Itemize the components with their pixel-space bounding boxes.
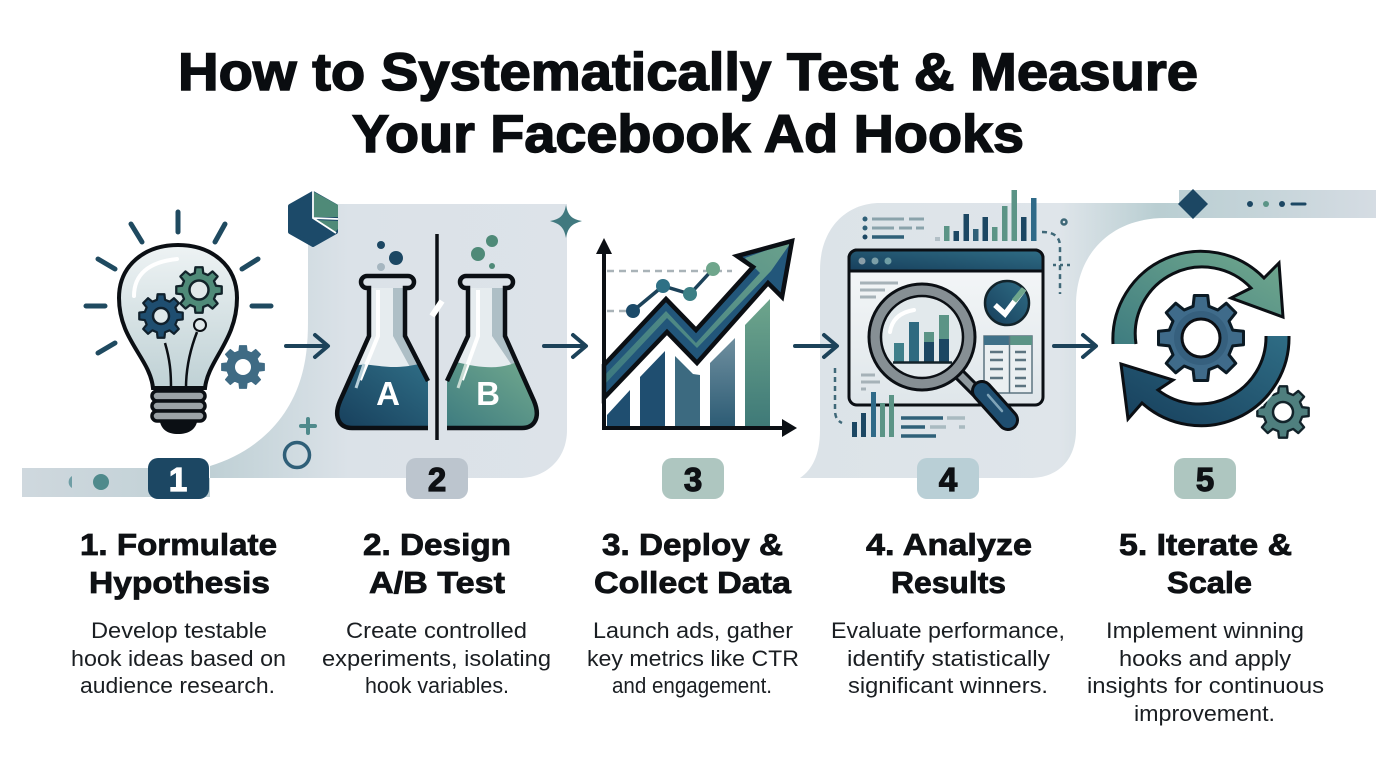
background ribbon: left band and panel 2 <box>22 204 567 497</box>
description: and engagement. <box>612 673 772 698</box>
decoration: plus sign <box>301 419 315 433</box>
filament loop <box>194 319 206 331</box>
window text lines <box>860 283 898 297</box>
step 5 text <box>1087 527 1324 726</box>
data line <box>626 262 720 318</box>
step 2 A/B flasks icon <box>337 234 537 440</box>
heading: Results <box>891 565 1006 600</box>
step badge 5 <box>1174 458 1236 499</box>
green gear <box>176 267 222 313</box>
central gear <box>1159 296 1243 380</box>
divider break <box>432 301 442 316</box>
step 1 lightbulb icon <box>86 212 271 434</box>
flask A <box>337 276 428 428</box>
title <box>178 43 1198 164</box>
heading: Scale <box>1167 565 1252 600</box>
heading: 5. Iterate & <box>1119 527 1292 562</box>
small side gear <box>222 346 264 388</box>
flask A: A <box>376 375 400 412</box>
step 5 iterate cycle icon <box>1113 251 1309 438</box>
data table <box>984 336 1032 393</box>
heading: Collect Data <box>594 565 792 600</box>
flask B <box>447 276 537 428</box>
description: identify statistically <box>847 646 1051 671</box>
dashed connector bottom left <box>835 368 842 423</box>
step badge 1: 1 <box>169 461 187 498</box>
heading <box>363 527 511 600</box>
bottom text list <box>901 418 965 436</box>
step badge 2: 2 <box>428 461 446 498</box>
top text list <box>862 216 924 240</box>
green arrow outline <box>1113 251 1283 344</box>
decoration: four-point star <box>550 205 582 238</box>
decoration: band dots and dash <box>1247 201 1305 207</box>
decoration: band half dot <box>69 476 72 488</box>
divider <box>435 234 439 440</box>
arrow 3 to 4 <box>795 335 837 357</box>
bottom bar chart <box>852 392 894 437</box>
rising bars <box>607 299 770 426</box>
light rays <box>86 212 271 353</box>
heading: 3. Deploy & <box>602 527 783 562</box>
decoration: diamond <box>1178 189 1208 219</box>
step 4 dashboard analysis icon <box>835 190 1070 437</box>
description: Evaluate performance, <box>831 618 1065 643</box>
step badge 4: 4 <box>939 461 958 498</box>
description <box>71 618 286 698</box>
description: Create controlled <box>346 618 527 643</box>
description: Implement winning <box>1106 618 1304 643</box>
decoration: band dot <box>93 474 109 490</box>
decoration: hexagon pie icon <box>290 191 338 245</box>
description <box>1087 618 1324 726</box>
magnifying glass <box>869 284 1008 420</box>
lower window text lines <box>861 375 880 389</box>
description <box>587 618 799 698</box>
heading <box>1119 527 1292 600</box>
heading: Hypothesis <box>89 565 270 600</box>
dashed connector top right <box>1042 220 1070 294</box>
step 3 text <box>587 527 799 698</box>
decoration: ring <box>284 442 310 468</box>
description: Develop testable <box>91 618 267 643</box>
description: insights for continuous <box>1087 673 1324 698</box>
description: hook ideas based on <box>71 646 286 671</box>
glass bulb <box>119 245 237 388</box>
trend arrow <box>604 241 792 398</box>
description: key metrics like CTR <box>587 646 799 671</box>
step badge 3 <box>662 458 724 499</box>
browser window <box>849 250 1043 405</box>
step badge 4 <box>917 458 979 499</box>
description: hook variables. <box>365 673 509 698</box>
step badge 3: 3 <box>684 461 702 498</box>
blue arrow outline <box>1121 336 1289 426</box>
blue gear <box>139 294 183 338</box>
heading: A/B Test <box>369 565 505 600</box>
small gear <box>1257 386 1309 438</box>
bulb highlight <box>134 259 177 296</box>
arrow 4 to 5 <box>1054 335 1096 357</box>
heading: 4. Analyze <box>866 527 1032 562</box>
heading <box>866 527 1032 600</box>
green upper cycle arrow <box>1113 251 1283 344</box>
heading: 2. Design <box>363 527 511 562</box>
description <box>322 618 551 698</box>
description: experiments, isolating <box>322 646 551 671</box>
filament wires <box>165 332 197 388</box>
arrow 1 to 2 <box>286 335 328 357</box>
axes <box>596 238 797 437</box>
bulb screw base <box>152 391 205 421</box>
description: improvement. <box>1134 701 1275 726</box>
description: Launch ads, gather <box>593 618 794 643</box>
heading <box>80 527 277 600</box>
background ribbon: panel 4 and right band <box>800 190 1376 478</box>
title: Your Facebook Ad Hooks <box>352 105 1024 164</box>
blue lower cycle arrow <box>1121 336 1289 426</box>
step 2 text <box>322 527 551 698</box>
bulb tip <box>160 422 197 434</box>
step 4 text <box>831 527 1065 698</box>
dashed guides <box>607 271 732 311</box>
step badge 2 <box>406 458 468 499</box>
flask B: B <box>476 375 500 412</box>
description: audience research. <box>80 673 275 698</box>
description: hooks and apply <box>1119 646 1292 671</box>
heading <box>594 527 792 600</box>
top bar chart <box>935 190 1036 241</box>
check badge <box>985 281 1029 325</box>
title: How to Systematically Test & Measure <box>178 43 1198 102</box>
description <box>831 618 1065 698</box>
step badge 1 <box>148 458 209 499</box>
bubbles <box>377 235 498 271</box>
step 3 growth chart icon <box>596 238 797 437</box>
description: significant winners. <box>848 673 1048 698</box>
arrow 2 to 3 <box>544 335 586 357</box>
step 1 text <box>71 527 286 698</box>
heading: 1. Formulate <box>80 527 277 562</box>
step badge 5: 5 <box>1196 461 1214 498</box>
